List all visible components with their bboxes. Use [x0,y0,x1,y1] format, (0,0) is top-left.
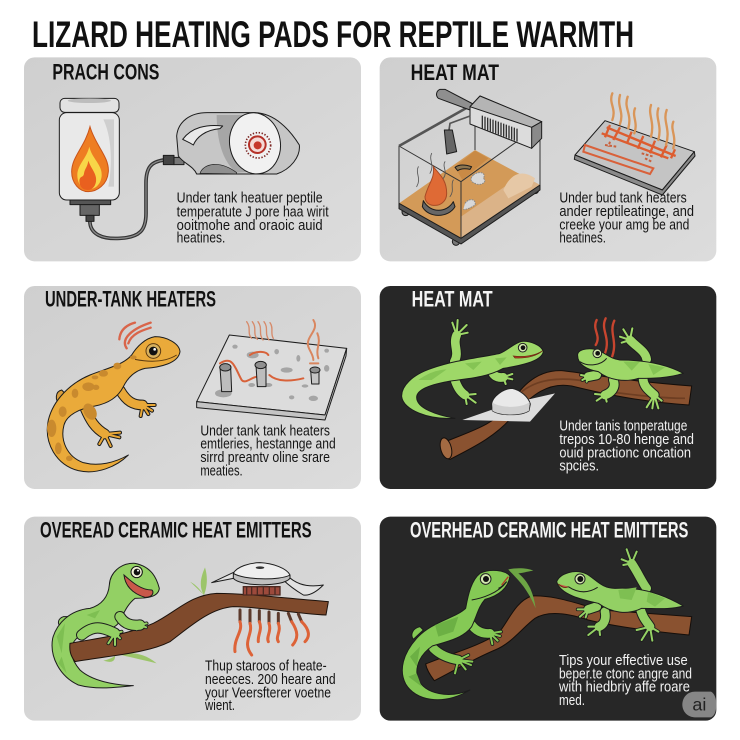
text block: Under tank tank heaters [200,423,330,439]
text block: creeke your amg be and [559,217,689,233]
text block: heatines. [559,230,606,246]
text block: neeeces. 200 heare and [205,672,336,688]
text block: wient. [204,698,235,714]
heading: HEAT MAT [411,60,499,85]
text block [200,423,336,479]
icon: green gecko [52,563,159,688]
heading: HEAT MAT [412,287,493,312]
illustration: branch [70,593,328,662]
text block: meaties. [200,463,243,479]
text block [177,191,329,247]
icon: glass tank with lamp and flame [399,89,542,245]
text block: emtleries, hestannge and [200,437,336,453]
illustration: branch [426,596,692,681]
text block: spcies. [559,459,599,475]
text block: Under bud tank heaters [559,191,687,207]
icon: green lizard left [402,320,543,419]
text block [204,659,336,714]
text block: Thup staroos of heate- [205,659,327,675]
icon: heat mat with waves [574,93,695,195]
icon: green lizard right [578,328,683,408]
text block: ooitmohe and oraoic auid [177,218,323,234]
panel: overead ceramic heat emitters [24,517,361,721]
panel: under-tank heaters [24,286,361,489]
panel: overhead ceramic heat emitters [380,517,716,721]
text block: Under tank heatuer peptile [177,191,323,207]
text block: with hiedbriy affe roare [558,680,690,696]
heading: OVEREAD CERAMIC HEAT EMITTERS [40,517,312,542]
text block: heatines. [177,231,225,247]
icon: jar heater with flame [59,98,164,238]
text block: trepos 10-80 henge and [559,432,694,448]
text block: ander reptileatinge, and [559,204,694,220]
text block: Under tanis tonperatuge [559,419,687,435]
icon: green lizard right [557,549,683,641]
badge: ai [682,692,716,717]
icon: ceramic emitter [212,563,323,595]
panel: heat mat light [380,57,716,261]
illustration: branch and heat pad [438,371,692,460]
text block [558,653,692,709]
heading: UNDER-TANK HEATERS [45,287,216,312]
badge: ai: ai [692,694,706,714]
icon: heat waves [595,318,614,359]
icon: leaves [103,567,207,663]
text block [559,191,694,246]
icon: heat controller device [163,109,299,178]
icon: leaf [508,568,536,608]
text block: sirrd preantv oline srare [200,450,330,466]
text block: beper.te ctonc angre and [559,666,692,682]
icon: orange gecko [47,323,180,472]
text block: your Veersfterer voetne [205,685,331,701]
icon: green lizard left [402,570,510,700]
panel: prach cons [24,57,361,261]
text block: med. [559,693,585,709]
icon: heat rays [235,610,308,655]
text block: Tips your effective use [559,653,688,669]
icon: heated rock slab [197,320,347,420]
text block [559,419,694,475]
icon: gecko legs [82,617,147,645]
text block: temperatute J pore haa wirit [177,205,329,221]
panel: heat mat dark [380,286,716,489]
text block: ouid practionc oncation [559,445,691,461]
heading: PRACH CONS [52,59,159,84]
